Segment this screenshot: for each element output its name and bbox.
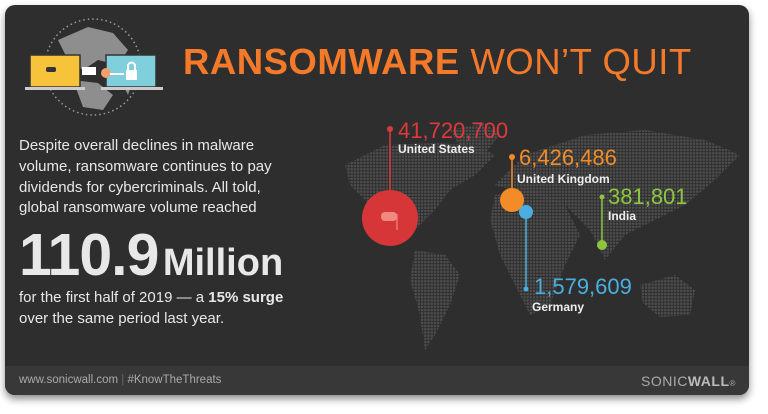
right laptop <box>106 55 156 87</box>
intro text: global ransomware volume reached <box>19 199 257 216</box>
footer links: www.sonicwall.com | #KnowTheThreats <box>19 374 221 386</box>
illustration: globe with laptops <box>25 18 163 116</box>
closing text <box>19 289 283 327</box>
intro text: dividends for cybercriminals. All told, <box>19 179 261 196</box>
closing text: over the same period last year. <box>19 310 224 327</box>
marker: India <box>597 184 688 250</box>
marker: United States: United States <box>398 142 475 156</box>
left laptop <box>30 55 80 87</box>
marker: Germany <box>519 205 632 314</box>
marker: India: India <box>608 209 636 223</box>
marker: United Kingdom: 6,426,486 <box>519 145 617 170</box>
marker: United Kingdom: United Kingdom <box>517 172 610 186</box>
logo: SONICWALL® <box>641 373 736 389</box>
big number: 110.9 Million <box>19 222 283 288</box>
marker: Germany: 1,579,609 <box>534 274 632 299</box>
footer <box>5 366 749 395</box>
marker: Germany: Germany <box>532 300 584 314</box>
title: RANSOMWARE WON’T QUIT <box>183 41 692 82</box>
marker: United States: 41,720,700 <box>398 118 508 143</box>
marker: United States <box>362 118 508 246</box>
intro text <box>19 137 272 216</box>
marker: India: 381,801 <box>608 184 688 209</box>
marker: United Kingdom <box>500 145 617 212</box>
intro text: Despite overall declines in malware <box>19 137 254 154</box>
intro text: volume, ransomware continues to pay <box>19 158 272 175</box>
closing text: for the first half of 2019 — a 15% surge <box>19 289 283 306</box>
